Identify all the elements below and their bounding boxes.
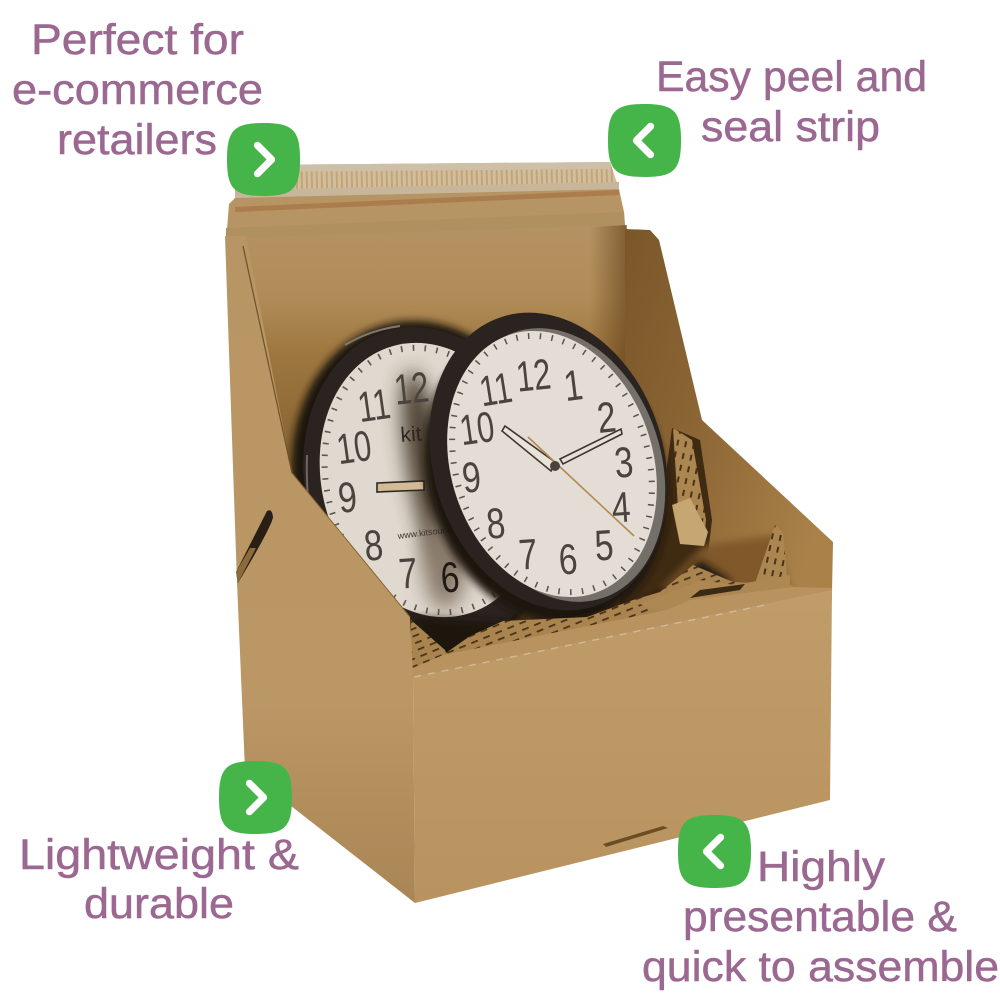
hour numerals: 6 xyxy=(557,536,579,585)
hour hand xyxy=(502,426,555,471)
brand text: kit xyxy=(400,423,422,447)
label text: quick to assemble xyxy=(642,943,999,991)
centre pin xyxy=(550,461,560,471)
shadow behind clock xyxy=(256,290,600,680)
hour numerals: 8 xyxy=(484,499,507,549)
label text xyxy=(12,16,263,164)
hour numerals: 6 xyxy=(439,554,461,603)
face xyxy=(290,318,570,642)
seal strip xyxy=(235,162,619,199)
hour numerals: 2 xyxy=(595,393,618,443)
deep shadow under clocks xyxy=(411,560,730,670)
hour numerals: 12 xyxy=(514,349,553,401)
hour numerals: 3 xyxy=(612,438,635,488)
bottom tab xyxy=(603,826,668,847)
hour numerals: 7 xyxy=(397,550,419,599)
icon: left chevron button xyxy=(608,104,681,177)
hour numerals: 9 xyxy=(460,453,483,503)
left side panel xyxy=(225,236,415,903)
label text: presentable & xyxy=(683,893,957,941)
scored edge xyxy=(414,604,770,677)
label text xyxy=(642,843,999,991)
hour numerals: 11 xyxy=(476,363,515,416)
back clock xyxy=(287,315,526,634)
tick marks xyxy=(420,310,684,618)
hour numerals: 4 xyxy=(610,484,632,533)
label text: retailers xyxy=(57,116,217,164)
hour numerals: 11 xyxy=(355,379,393,431)
hour numerals xyxy=(334,362,461,603)
hour numerals xyxy=(457,349,635,585)
metal ring xyxy=(419,300,699,630)
label text: durable xyxy=(84,880,234,928)
top flap xyxy=(226,189,625,242)
tick marks xyxy=(296,324,564,636)
clock hand xyxy=(377,481,424,492)
back wall xyxy=(240,225,630,680)
outer rim xyxy=(392,281,705,642)
rim xyxy=(269,298,591,672)
second hand xyxy=(528,437,634,536)
hour numerals: 7 xyxy=(517,531,539,580)
front panel xyxy=(413,587,832,903)
inner lip xyxy=(413,587,832,680)
box: back wall with seal strip xyxy=(226,162,630,680)
crumpled paper filling (rear) xyxy=(620,428,790,640)
crumpled paper filling (front) xyxy=(411,560,793,672)
label text: Easy peel and xyxy=(656,53,927,101)
main paper layer xyxy=(443,565,793,672)
hand slot xyxy=(236,510,273,583)
fold line xyxy=(243,246,292,473)
hour numerals: 10 xyxy=(334,421,374,473)
icon: right chevron button xyxy=(219,761,292,834)
hour numerals: 5 xyxy=(593,522,615,571)
hour numerals: 12 xyxy=(392,362,431,414)
callout: lightweight and durable xyxy=(19,761,299,928)
hour numerals: 10 xyxy=(457,402,497,454)
label text: seal strip xyxy=(701,103,880,151)
hour numerals: 9 xyxy=(336,473,359,523)
rim highlight xyxy=(345,326,400,345)
label text xyxy=(656,53,927,151)
callout: easy peel and seal strip xyxy=(608,53,927,177)
hour numerals: 8 xyxy=(362,521,385,571)
label text: Perfect for xyxy=(31,16,244,64)
hour numerals: 1 xyxy=(561,361,585,411)
right inner flap xyxy=(625,229,833,640)
label text xyxy=(19,831,299,928)
icon: left chevron button xyxy=(678,815,751,888)
face xyxy=(414,303,690,625)
front clock xyxy=(387,281,705,655)
callout: perfect for e-commerce retailers xyxy=(12,16,300,196)
label text: Lightweight & xyxy=(19,831,299,879)
drop shadow xyxy=(387,297,705,655)
label text: e-commerce xyxy=(12,66,263,114)
label text: Highly xyxy=(757,843,886,891)
minute hand xyxy=(560,429,622,464)
face shadow cast by front clock xyxy=(391,368,467,610)
icon: right chevron button xyxy=(227,123,300,196)
back clock: www.kitsound xyxy=(396,524,453,541)
callout: highly presentable and quick to assemble xyxy=(642,815,999,991)
left paper patch xyxy=(411,620,450,672)
